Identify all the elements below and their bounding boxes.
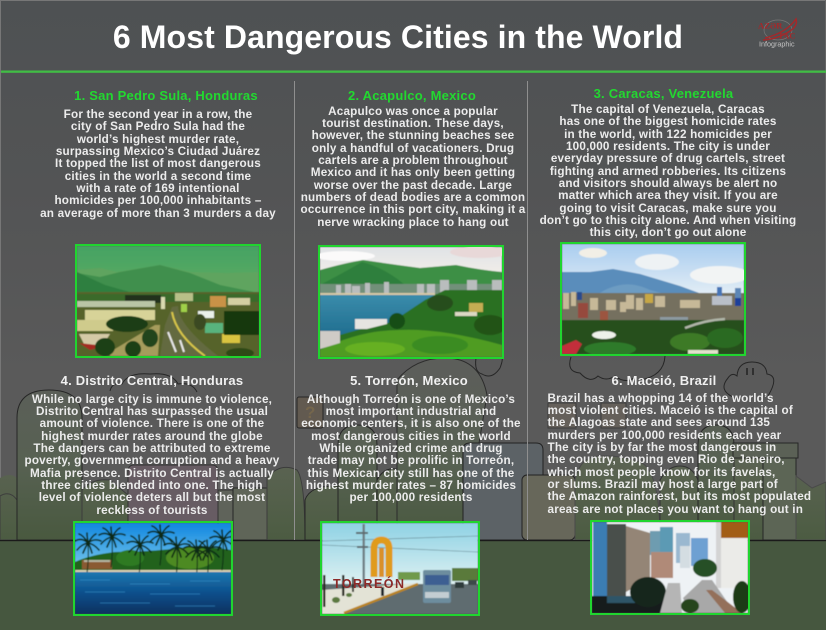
text 4: The dangers can be attributed to extreme bbox=[33, 442, 271, 455]
text 3: and visitors should always be alert no bbox=[559, 177, 777, 190]
text 6: which most people know for its favelas, bbox=[548, 466, 775, 479]
logo bbox=[758, 19, 796, 48]
photo: San Pedro Sula bbox=[77, 246, 259, 358]
heading 2: 2. Acapulco, Mexico bbox=[348, 88, 476, 103]
text 2: nerve wracking place to hang out bbox=[317, 216, 509, 229]
Mario-style backdrop scenery bbox=[0, 356, 826, 540]
text 4: Mafia presence. Distrito Central is actually bbox=[30, 467, 274, 480]
text 6: the Alagoas state and sees around 135 bbox=[548, 416, 770, 429]
text 1: an average of more than 3 murders a day bbox=[40, 207, 276, 220]
text 1: homicides per 100,000 inhabitants – bbox=[54, 194, 262, 207]
header rule bbox=[1, 70, 826, 73]
text 2: occurrence in this port city, making it a bbox=[301, 203, 525, 216]
text 3: has one of the biggest homicide rates bbox=[559, 115, 777, 128]
text 6: most violent cities. Maceió is the capital of bbox=[548, 404, 793, 417]
text 4: level of violence deters all but the most bbox=[39, 491, 265, 504]
text 2: Acapulco was once a popular bbox=[328, 104, 498, 118]
text 5: While organized crime and drug bbox=[319, 442, 503, 455]
text 3: matter which area they visit. If you are bbox=[558, 189, 778, 202]
Mario-style backdrop scenery: ? bbox=[305, 403, 315, 422]
photo frame 1 bbox=[76, 245, 260, 357]
text 5: trade may not be prolific in Torreón, bbox=[308, 454, 514, 467]
photo frame 5 bbox=[321, 522, 479, 615]
photo: Distrito Central bbox=[75, 523, 236, 614]
heading 6: 6. Maceió, Brazil bbox=[612, 373, 716, 388]
text 4: While no large city is immune to violence, bbox=[32, 392, 272, 406]
text 4: three cities blended into one. The high bbox=[41, 479, 263, 492]
photo frame 6 bbox=[591, 521, 749, 614]
text 1: cities in the world a second time bbox=[65, 170, 251, 183]
text 5: most important industrial and bbox=[326, 405, 496, 418]
text 1: It topped the list of most dangerous bbox=[55, 157, 261, 170]
text 1: For the second year in a row, the bbox=[64, 108, 252, 121]
text 2 bbox=[300, 104, 526, 229]
photo: Caracas bbox=[562, 244, 750, 356]
text 3 bbox=[540, 103, 796, 239]
text 4: Distrito Central has surpassed the usual bbox=[36, 405, 268, 418]
text 3: in the world, with 122 homicides per bbox=[564, 128, 772, 141]
text 5: this Mexican city still has one of the bbox=[308, 467, 514, 480]
photo frame 2 bbox=[319, 246, 503, 358]
text 5: Although Torreón is one of Mexico’s bbox=[307, 392, 515, 406]
logo: AZƏR bbox=[758, 20, 783, 30]
text 5: most dangerous cities in the world bbox=[311, 430, 511, 443]
photo sign text: TORREÓN bbox=[333, 576, 404, 591]
text 5: per 100,000 residents bbox=[349, 491, 473, 504]
text 5: economic centers, it is also one of the bbox=[301, 417, 521, 430]
photo: Torreon bbox=[322, 523, 478, 614]
logo: TAC bbox=[778, 30, 796, 40]
text 6: Brazil has a whopping 14 of the world’s bbox=[548, 392, 774, 404]
text 3: this city, don’t go out alone bbox=[590, 226, 746, 239]
heading 5: 5. Torreón, Mexico bbox=[350, 373, 468, 388]
text 1: city of San Pedro Sula had the bbox=[71, 120, 245, 133]
text 2: tourist destination. These days, bbox=[322, 117, 504, 130]
text 3: going to visit Caracas, make sure you bbox=[559, 202, 777, 215]
text 2: only a handful of vacationers. Drug bbox=[312, 142, 514, 155]
text 2: worse over the past decade. Large bbox=[314, 179, 512, 192]
text 4 bbox=[24, 392, 280, 517]
text 2: numbers of dead bodies are a common bbox=[301, 191, 525, 204]
text 6: murders per 100,000 residents each year bbox=[548, 429, 781, 442]
text 1: world’s highest murder rate, bbox=[77, 133, 239, 146]
text 5: highest murder rates – 87 homicides bbox=[306, 479, 516, 492]
divider lines bbox=[294, 81, 528, 540]
heading 4: 4. Distrito Central, Honduras bbox=[61, 373, 243, 388]
text 4: reckless of tourists bbox=[96, 504, 208, 517]
text 4: highest murder rates around the globe bbox=[41, 430, 263, 443]
text 3: The capital of Venezuela, Caracas bbox=[571, 103, 765, 116]
text 6: The city is by far the most dangerous in bbox=[548, 441, 776, 454]
text 2: cartels are a problem throughout bbox=[318, 154, 508, 167]
text 1: surpassing Mexico’s Ciudad Juárez bbox=[56, 145, 260, 158]
text 1 bbox=[40, 108, 276, 220]
text 6: the country, topping even Rio de Janeiro, bbox=[548, 453, 785, 466]
photo frame 3 bbox=[561, 243, 745, 355]
title: 6 Most Dangerous Cities in the World bbox=[113, 19, 683, 55]
text 6: areas are not places you want to hang out in bbox=[548, 503, 803, 516]
text 3: don’t go to this city alone. And when visiting bbox=[540, 214, 796, 227]
text 4: amount of violence. There is one of the bbox=[40, 417, 264, 430]
photo: Acapulco bbox=[315, 246, 510, 357]
text 6 bbox=[548, 392, 811, 516]
photo frame 4 bbox=[74, 522, 232, 615]
text 5 bbox=[301, 392, 521, 504]
text 3: everyday pressure of drug cartels, street bbox=[551, 152, 785, 165]
text 2: Mexico and it has only been getting bbox=[311, 166, 515, 179]
text 6: the Amazon rainforest, but its most populated bbox=[548, 490, 811, 503]
text 2: however, the stunning beaches see bbox=[312, 129, 514, 142]
heading 1: 1. San Pedro Sula, Honduras bbox=[74, 88, 258, 103]
photo: Maceio bbox=[592, 522, 751, 613]
text 1: with a rate of 169 intentional bbox=[76, 182, 240, 195]
text 3: 100,000 residents. The city is under bbox=[566, 140, 770, 153]
text 6: or slums. Brazil may host a large part of bbox=[548, 478, 778, 491]
text 4: poverty, government corruption and a heavy bbox=[24, 454, 279, 467]
text 3: fighting and armed robberies. Its citizens bbox=[550, 165, 786, 178]
logo: Infographic bbox=[759, 40, 795, 48]
heading 3: 3. Caracas, Venezuela bbox=[594, 86, 733, 100]
